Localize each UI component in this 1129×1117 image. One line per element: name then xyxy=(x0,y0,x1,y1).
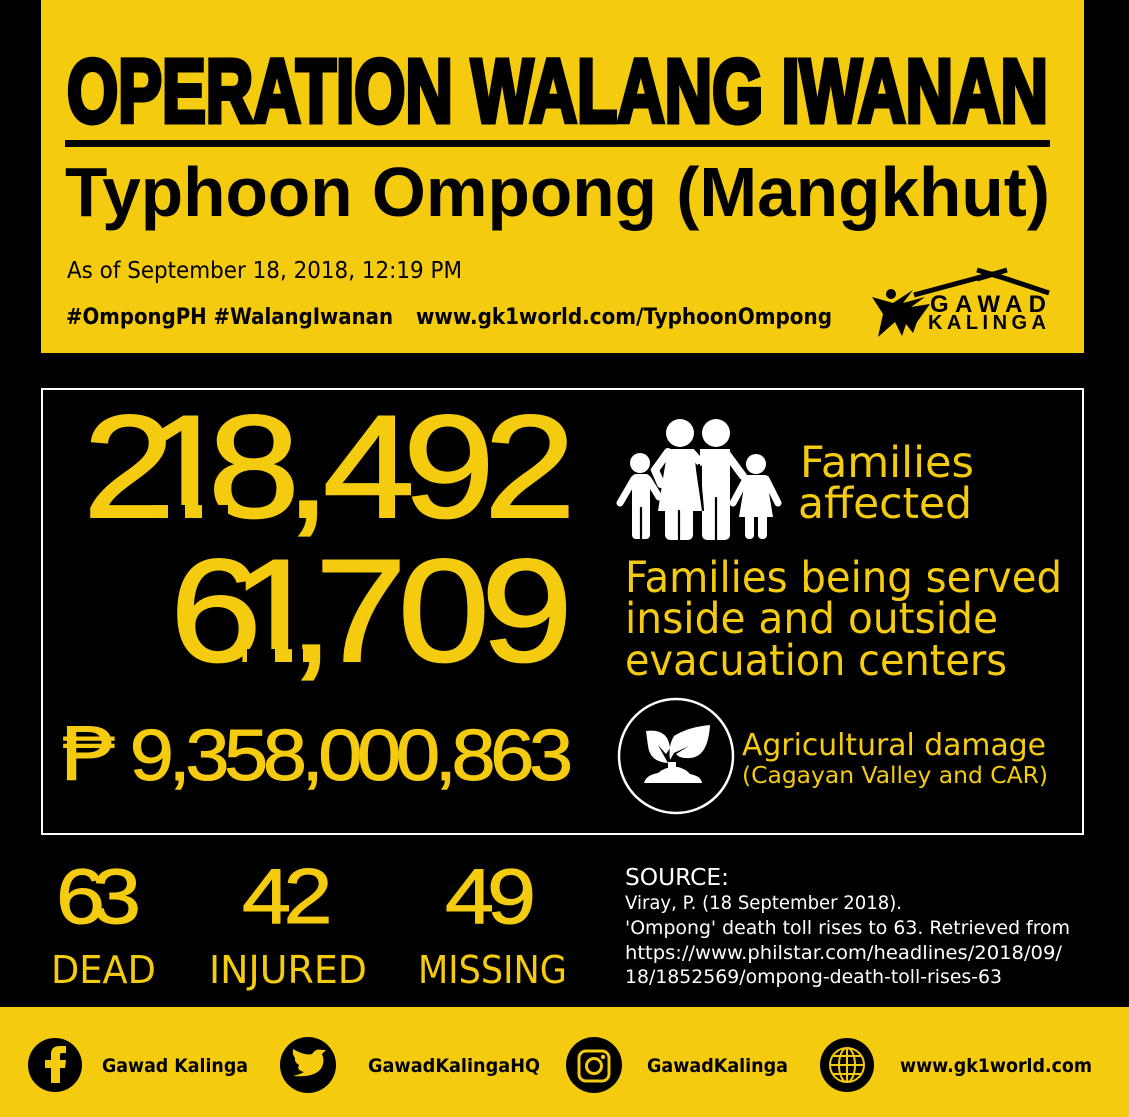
social label: twitter: GawadKalingaHQ xyxy=(368,1055,540,1077)
website link: www.gk1world.com/TyphoonOmpong xyxy=(416,305,832,330)
logo: Gawad Kalinga: KALINGA xyxy=(928,312,1046,334)
number: families served: 61,709 xyxy=(170,530,573,693)
casualty stat: missing: MISSING xyxy=(418,948,567,992)
footer bar xyxy=(0,1007,1129,1117)
label: agricultural damage: Agricultural damage xyxy=(742,728,1046,763)
hashtags: #OmpongPH #WalangIwanan xyxy=(66,305,393,330)
casualty stat: injured: 42 xyxy=(242,853,333,940)
casualty stat: dead: 63 xyxy=(56,853,141,940)
label: families affected xyxy=(798,438,974,529)
casualty stat: missing xyxy=(418,853,567,992)
casualty stat: dead: DEAD xyxy=(51,948,156,992)
peso sign: ₱ xyxy=(60,712,120,798)
label: families affected: Families xyxy=(800,438,974,488)
icon: family xyxy=(620,419,778,541)
icon: plant seedling xyxy=(619,699,733,813)
label: agricultural damage: (Cagayan Valley and CAR) xyxy=(742,763,1048,789)
header panel xyxy=(41,0,1084,353)
source citation: 18/1852569/ompong-death-toll-rises-63 xyxy=(625,966,1002,988)
social label: instagram: GawadKalinga xyxy=(647,1055,788,1077)
label: families being served: Families being served xyxy=(625,553,1062,603)
casualty stat: injured xyxy=(209,853,367,992)
label: families being served: inside and outside xyxy=(625,594,998,644)
label: agricultural damage xyxy=(742,728,1048,789)
stats panel xyxy=(42,386,1083,834)
casualty stat: injured: INJURED xyxy=(209,948,367,992)
title rule xyxy=(65,140,1050,147)
casualty stat: dead xyxy=(51,853,156,992)
icon: twitter xyxy=(280,1037,336,1093)
source citation: 'Ompong' death toll rises to 63. Retrieved from xyxy=(625,917,1070,939)
logo: Gawad Kalinga: GAWAD xyxy=(930,291,1046,318)
logo: Gawad Kalinga xyxy=(872,270,1049,337)
number: agricultural damage: 9,358,000,863 xyxy=(130,715,573,796)
icon: facebook xyxy=(28,1038,82,1092)
label: families being served: evacuation centers xyxy=(625,636,1007,686)
number: families affected: 218,492 xyxy=(83,386,576,549)
source citation: Viray, P. (18 September 2018). xyxy=(625,892,902,914)
subtitle: Typhoon Ompong (Mangkhut) xyxy=(65,153,1050,231)
social label: facebook: Gawad Kalinga xyxy=(102,1055,248,1077)
label: families being served xyxy=(625,553,1062,686)
date line: As of September 18, 2018, 12:19 PM xyxy=(67,258,462,284)
source citation xyxy=(625,865,1070,988)
source citation: SOURCE: xyxy=(625,865,729,891)
icon: instagram xyxy=(566,1037,622,1093)
icon: globe xyxy=(820,1038,874,1092)
social label: website: www.gk1world.com xyxy=(900,1055,1092,1077)
source citation: https://www.philstar.com/headlines/2018/09/ xyxy=(625,942,1063,964)
label: families affected: affected xyxy=(798,479,972,529)
casualty stat: missing: 49 xyxy=(445,853,536,940)
